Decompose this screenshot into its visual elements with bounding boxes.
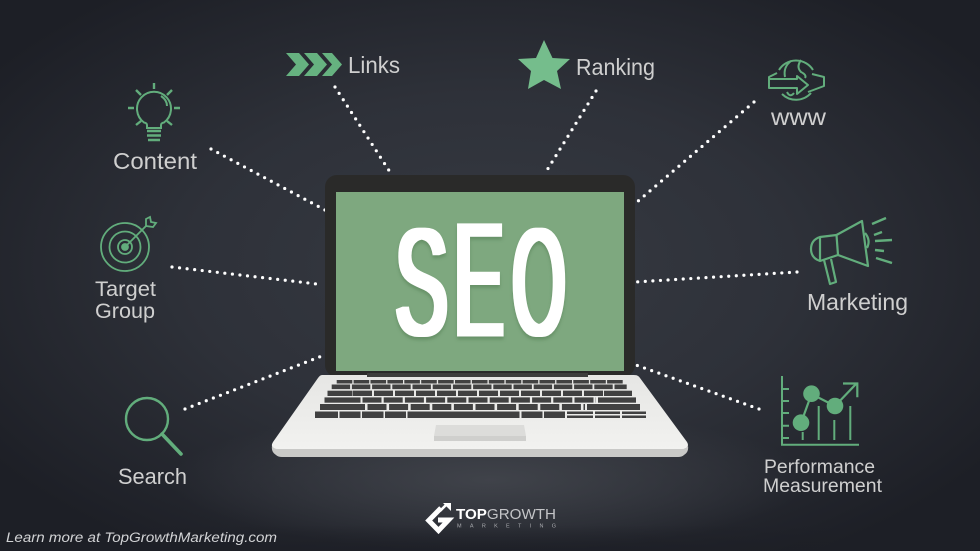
label: Performance xyxy=(764,457,875,478)
label: Content xyxy=(113,148,198,174)
logo: MARKETING xyxy=(457,524,556,530)
label xyxy=(95,278,156,323)
icon: chevrons xyxy=(286,53,342,76)
item: Search xyxy=(118,398,187,489)
SEO heading: E xyxy=(454,188,504,371)
item: Ranking xyxy=(518,40,655,89)
label: Marketing xyxy=(807,289,908,315)
laptop screen xyxy=(336,192,624,371)
SEO heading xyxy=(395,188,565,371)
label: Search xyxy=(118,464,187,489)
item: WWW xyxy=(769,60,826,130)
icon: megaphone xyxy=(811,218,892,284)
SEO heading: O xyxy=(512,198,565,369)
label: Measurement xyxy=(763,476,883,497)
icon: target with arrow xyxy=(101,217,156,271)
trackpad xyxy=(434,425,526,441)
icon: line chart xyxy=(782,376,859,445)
item: Links xyxy=(286,52,400,78)
logo mark xyxy=(429,503,451,530)
SEO heading: S xyxy=(395,197,448,368)
keyboard xyxy=(315,382,646,418)
label: Links xyxy=(348,52,400,78)
dotted connectors xyxy=(172,87,797,409)
label: Target xyxy=(95,278,156,301)
laptop base xyxy=(272,375,688,451)
laptop lid xyxy=(325,175,635,377)
item: Performance Measurement xyxy=(763,376,883,497)
item: Marketing xyxy=(807,218,908,315)
icon: light bulb xyxy=(128,83,180,140)
footer note: Learn more at TopGrowthMarketing.com xyxy=(6,530,277,545)
icon: globe with arrow band xyxy=(769,60,824,100)
label: Group xyxy=(95,300,155,323)
laptop xyxy=(272,175,688,457)
item: Content xyxy=(113,83,198,174)
icon: magnifying glass xyxy=(126,398,181,454)
logo wordmark: TOPGROWTH xyxy=(456,507,556,523)
hinge xyxy=(367,373,588,377)
logo xyxy=(429,503,556,530)
item: Target Group xyxy=(95,217,156,323)
label: www xyxy=(770,104,826,130)
label xyxy=(763,457,883,497)
icon: star xyxy=(518,40,570,89)
label: Ranking xyxy=(576,54,655,80)
